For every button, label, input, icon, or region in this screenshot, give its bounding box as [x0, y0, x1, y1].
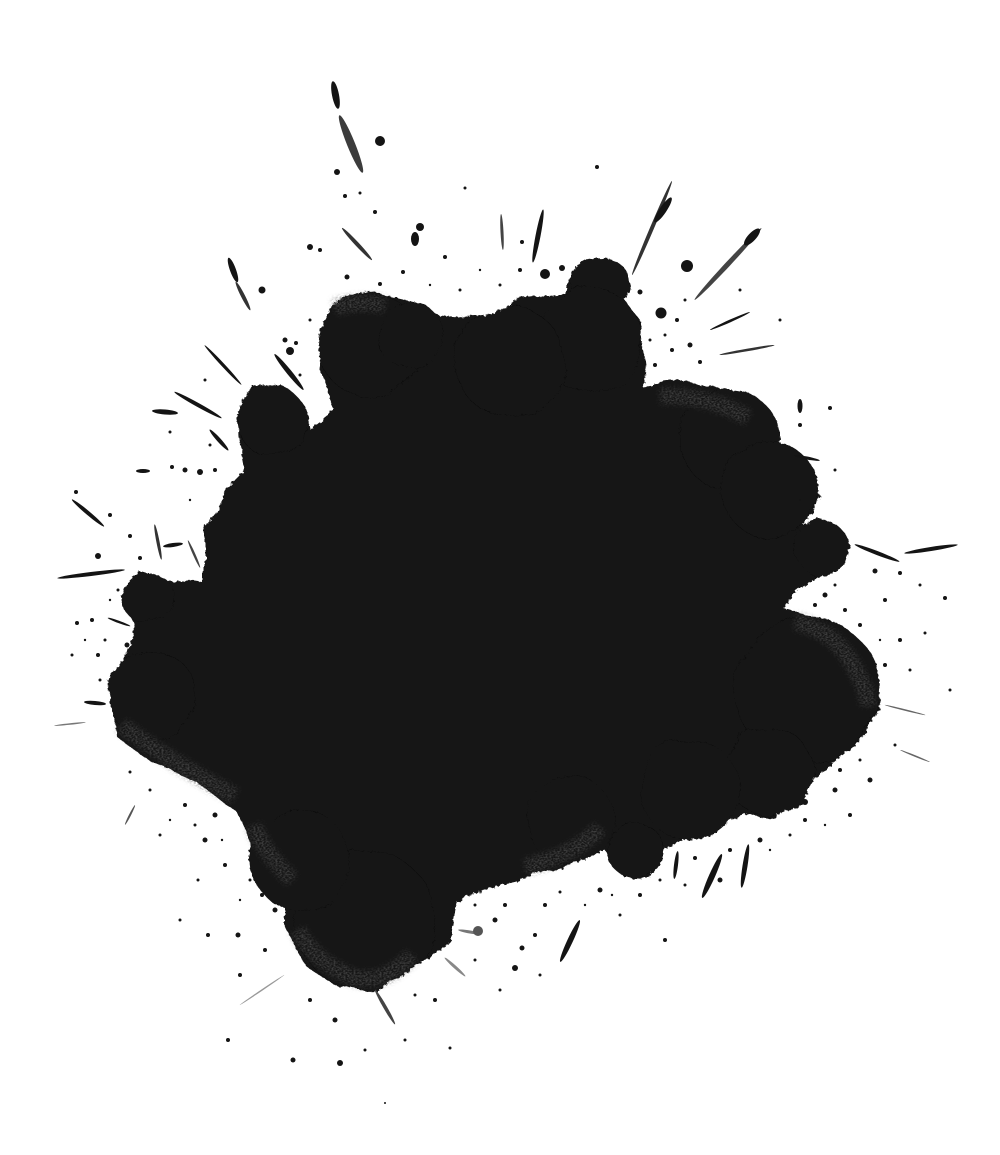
- side streaks: [54, 399, 958, 763]
- top streaks: [152, 81, 775, 452]
- grey dry-brush rims: [122, 303, 868, 979]
- main ink blob: [108, 256, 881, 990]
- spatter streaks: [54, 81, 958, 1025]
- bottom streaks: [124, 805, 751, 1025]
- spatter droplets: [70, 136, 952, 1104]
